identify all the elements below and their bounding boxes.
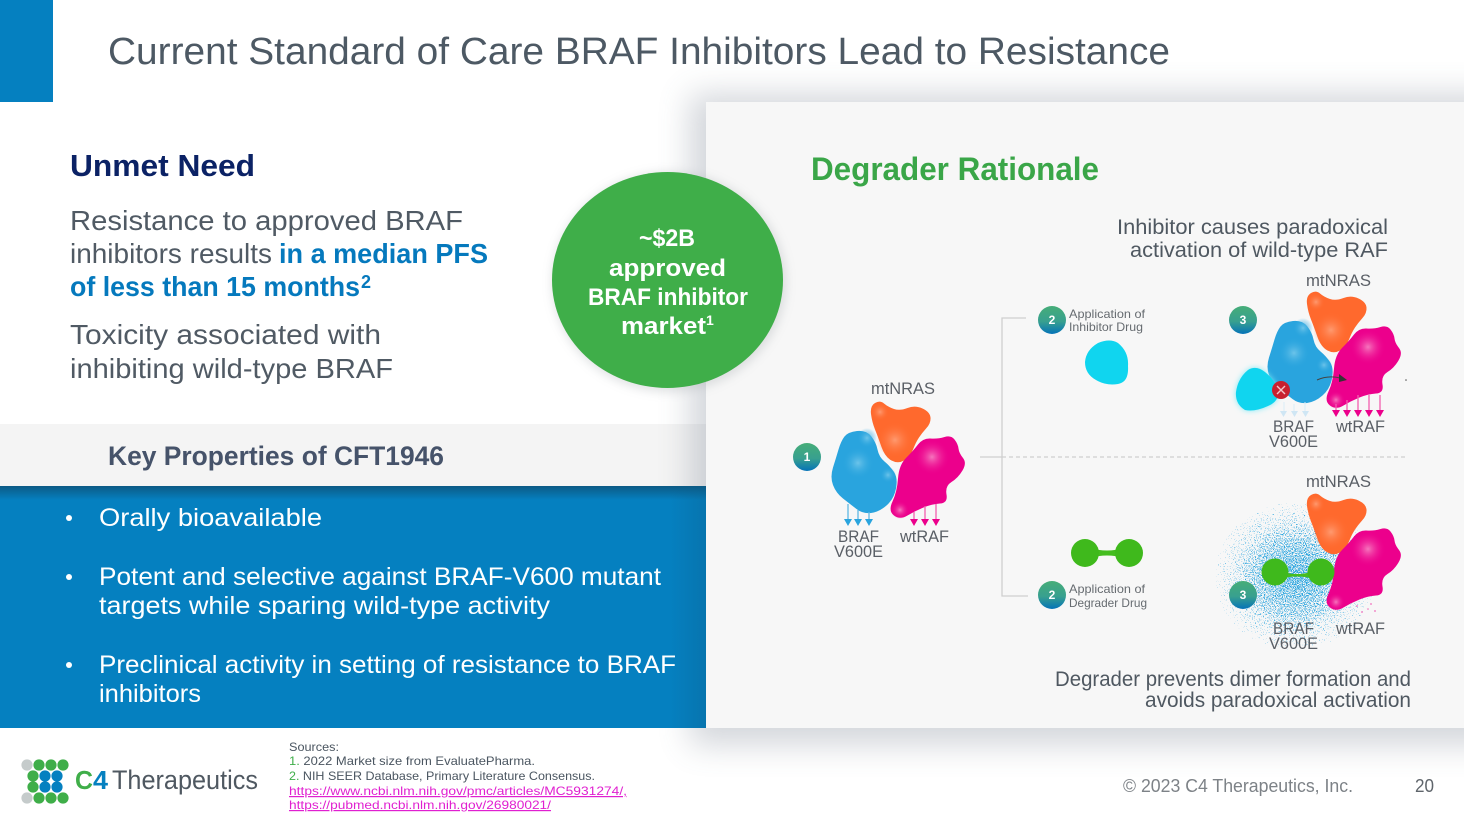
step 1: initial complex: mtNRAS (871, 379, 935, 398)
step 1: initial complex: 1 (804, 450, 811, 464)
title: Current Standard of Care BRAF Inhibitors Lead to Resistance (108, 31, 1170, 73)
step 1: initial complex: BRAF (838, 527, 879, 546)
sources (289, 740, 627, 812)
step 2: application of degrader drug: Degrader Drug (1069, 596, 1147, 610)
callout: market size: BRAF inhibitor (588, 284, 748, 311)
step 3: degraded BRAF complex: BRAF (1273, 619, 1314, 638)
text block: unmet need body: of less than 15 months (70, 271, 360, 302)
bullet: preclinical activity: Preclinical activity in setting of resistance to BRAF (99, 651, 676, 679)
bullet: orally bioavailable: Orally bioavailable (99, 504, 322, 532)
footer: page number: 20 (1415, 776, 1434, 796)
bullet: potent and selective: Potent and selective against BRAF-V600 mutant (99, 563, 661, 591)
step 3: degraded BRAF complex: 3 (1240, 588, 1247, 602)
step 2: application of degrader drug: 2 (1049, 588, 1056, 602)
key properties band: Key Properties of CFT1946 (108, 441, 444, 471)
caption: degrader effect (1055, 668, 1411, 712)
step 2: application of inhibitor drug: Application of (1069, 307, 1146, 321)
callout: market size: 1 (706, 312, 714, 328)
bullet: preclinical activity: inhibitors (99, 680, 201, 708)
step 3: degraded BRAF complex: wtRAF (1335, 619, 1385, 638)
caption: inhibitor effect: Inhibitor causes paradoxical (1117, 216, 1388, 239)
step 3: paradoxical activation complex: wtRAF (1335, 417, 1385, 436)
text block: unmet need body: in a median PFS (279, 238, 488, 269)
bullet: potent and selective (66, 563, 661, 620)
text block: unmet need body: 2 (361, 272, 371, 292)
step 3: degraded BRAF complex (1215, 472, 1401, 653)
step 3: paradoxical activation complex: V600E (1269, 432, 1318, 451)
logo: C4 Therapeutics: 4 (93, 765, 109, 795)
step 2: application of degrader drug (1038, 539, 1147, 610)
step 2: application of inhibitor drug: 2 (1049, 313, 1056, 327)
step 3: paradoxical activation complex: mtNRAS (1306, 271, 1371, 290)
sources: Sources: (289, 740, 339, 754)
callout: market size: approved (609, 255, 726, 282)
panel shadow (690, 94, 1464, 745)
logo: C4 Therapeutics: Therapeutics (112, 765, 258, 795)
bullet: potent and selective: targets while sparing wild-type activity (99, 592, 551, 620)
panel: degrader rationale (706, 102, 1464, 728)
step 1: initial complex (793, 379, 965, 561)
text block: unmet need body: Toxicity associated with (70, 319, 381, 350)
step 3: paradoxical activation complex (1229, 271, 1407, 451)
caption: inhibitor effect (1117, 216, 1388, 262)
header accent block (0, 0, 53, 102)
text block: unmet need body (70, 205, 488, 384)
step 2: application of inhibitor drug: Inhibitor Drug (1069, 320, 1143, 334)
sources: https://pubmed.ncbi.nlm.nih.gov/26980021/ (289, 798, 552, 812)
step 1: initial complex: V600E (834, 542, 883, 561)
step 2: application of degrader drug: Application of (1069, 582, 1146, 596)
caption: degrader effect: avoids paradoxical activation (1145, 689, 1411, 712)
step 3: paradoxical activation complex: BRAF (1273, 417, 1314, 436)
step 1: initial complex: wtRAF (899, 527, 949, 546)
callout: market size: ~$2B (639, 225, 695, 252)
footer: copyright: © 2023 C4 Therapeutics, Inc. (1123, 776, 1353, 796)
step 3: degraded BRAF complex: V600E (1269, 634, 1318, 653)
step 2: application of inhibitor drug (1038, 306, 1146, 384)
heading: unmet need: Unmet Need (70, 148, 255, 183)
key properties band (0, 424, 706, 486)
panel: key properties list (0, 486, 706, 728)
logo: C4 Therapeutics (21, 759, 258, 804)
bullet: preclinical activity (66, 651, 676, 708)
sources: 1. 2022 Market size from EvaluatePharma. (289, 754, 535, 768)
sources: 2. NIH SEER Database, Primary Literature Consensus. (289, 769, 595, 783)
callout shadow (552, 172, 786, 392)
step 3: degraded BRAF complex: mtNRAS (1306, 472, 1371, 491)
step 3: paradoxical activation complex: 3 (1240, 313, 1247, 327)
text block: unmet need body: inhibiting wild-type BRAF (70, 353, 393, 384)
callout: market size (552, 172, 783, 388)
sources: https://www.ncbi.nlm.nih.gov/pmc/articles/MC5931274/, (289, 784, 627, 798)
callout: market size: market (621, 313, 706, 340)
text block: unmet need body: inhibitors results (70, 238, 272, 269)
diagram bracket connector (980, 318, 1407, 596)
caption: inhibitor effect: activation of wild-type RAF (1130, 239, 1388, 262)
logo: C4 Therapeutics: C (75, 765, 93, 795)
caption: degrader effect: Degrader prevents dimer formation and (1055, 668, 1411, 691)
text block: unmet need body: Resistance to approved BRAF (70, 205, 463, 236)
heading: degrader rationale: Degrader Rationale (811, 151, 1099, 187)
